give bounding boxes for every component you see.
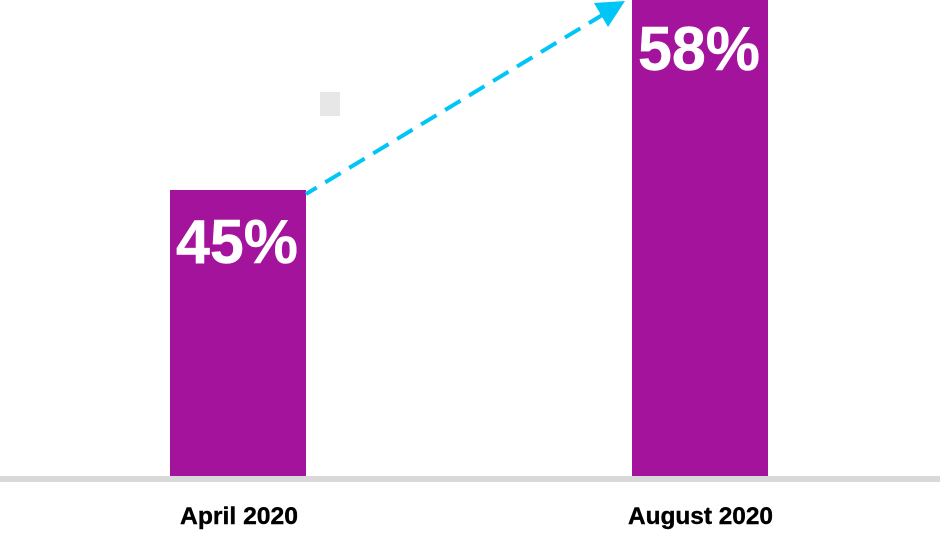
small grey square: [320, 92, 340, 116]
value: 45%: 45%: [176, 208, 298, 277]
value: 58%: 58%: [638, 15, 760, 84]
bar: April 2020: [170, 190, 306, 476]
label: August 2020: August 2020: [628, 503, 773, 530]
arrow: growth trend: [306, 1, 625, 194]
label: April 2020: April 2020: [180, 503, 298, 530]
baseline axis: [0, 476, 940, 482]
bar: August 2020: [632, 0, 768, 476]
